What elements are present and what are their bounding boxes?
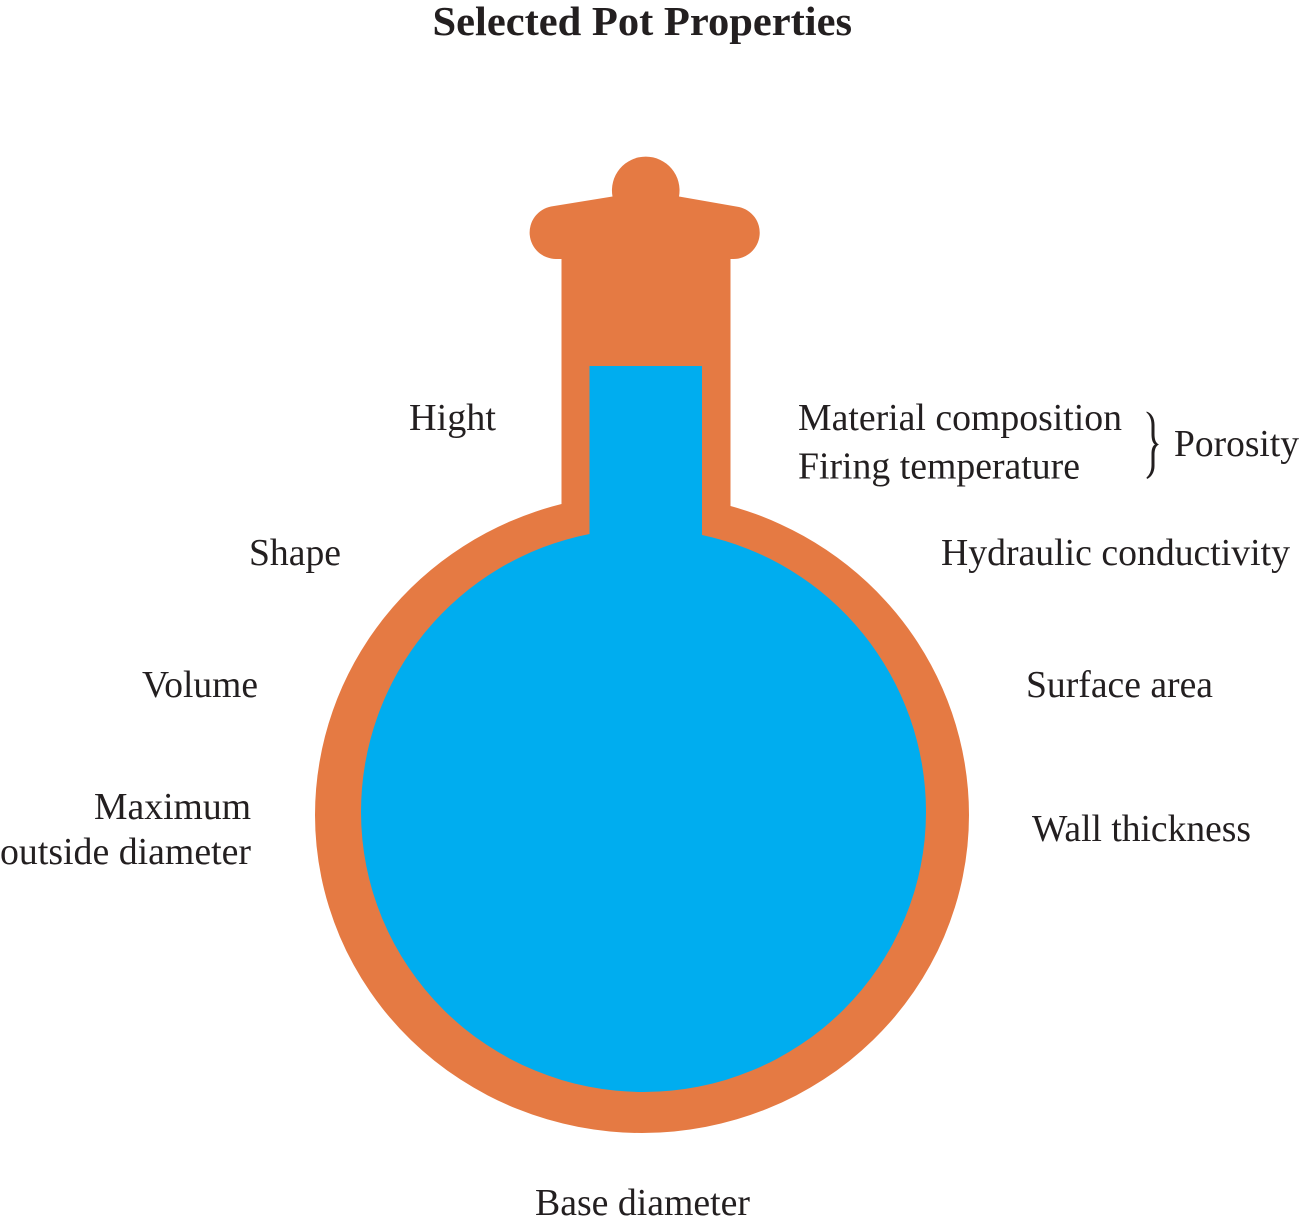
- label: firing temperature: Firing temperature: [798, 446, 1080, 488]
- label: volume: Volume: [142, 664, 258, 706]
- label: shape: Shape: [249, 532, 341, 574]
- label: porosity: Porosity: [1174, 423, 1299, 465]
- label: maximum outside diameter: [0, 786, 251, 873]
- label: hydraulic conductivity: Hydraulic conductivity: [941, 532, 1290, 574]
- pot diagram: [315, 157, 969, 1133]
- label: base diameter: Base diameter: [535, 1182, 750, 1224]
- label: hight: Hight: [409, 397, 496, 439]
- pot body: outer orange: [315, 157, 969, 1133]
- water: inner blue: [361, 366, 926, 1092]
- label: maximum outside diameter: outside diameter: [0, 831, 251, 873]
- label: surface area: Surface area: [1026, 664, 1213, 706]
- label: material composition: Material composition: [798, 397, 1122, 439]
- brace: [1146, 412, 1159, 479]
- label: maximum outside diameter: Maximum: [94, 786, 251, 828]
- label: wall thickness: Wall thickness: [1032, 808, 1251, 850]
